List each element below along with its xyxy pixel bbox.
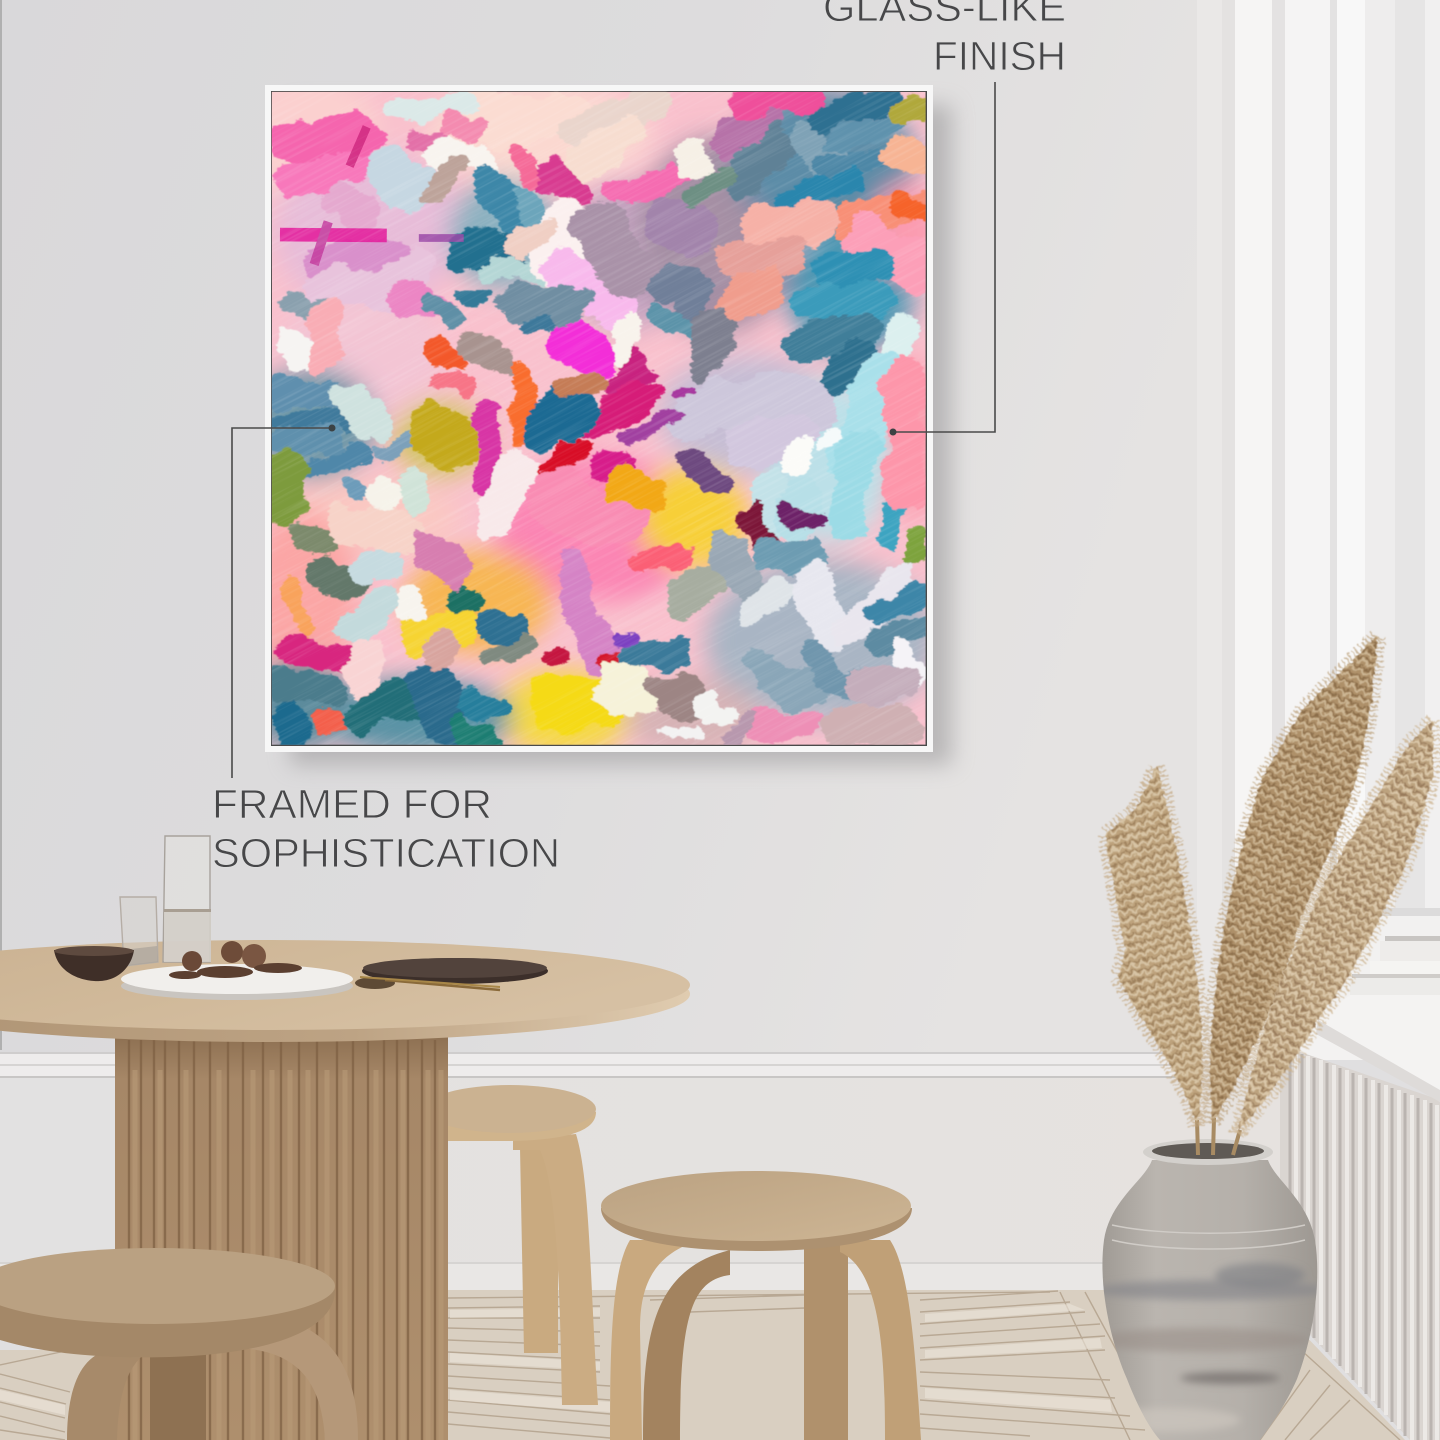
- callout text: glass-like finish: [823, 0, 1066, 79]
- stack of books: [1350, 936, 1440, 995]
- white frame: [265, 85, 933, 752]
- sharp magenta bars: [280, 127, 464, 264]
- radiator: [1280, 1045, 1440, 1440]
- vase weathering: [1090, 1263, 1325, 1432]
- callout text: framed for sophistication: FRAMED FOR: [212, 781, 492, 827]
- table top: [0, 940, 690, 1042]
- glass carafe: [163, 836, 211, 962]
- leader dot: framed for sophistication: [328, 424, 336, 432]
- stool legs: [610, 1240, 700, 1440]
- window frame: [1197, 0, 1440, 1060]
- wall: [0, 0, 1200, 1060]
- leader dot: glass-like finish: [890, 428, 896, 436]
- frame inner gap: [271, 91, 927, 746]
- floor: [0, 1290, 1405, 1440]
- stool legs: [150, 1340, 206, 1440]
- leader line: glass-like finish: [893, 82, 995, 432]
- back stool: [424, 1085, 598, 1405]
- callout text: glass-like finish: FINISH: [933, 33, 1066, 79]
- callout: glass-like finish: [823, 0, 1066, 436]
- dark wooden plate: [362, 958, 548, 984]
- vase rim: [1143, 1139, 1273, 1165]
- stool seat: [0, 1290, 335, 1357]
- skirting board: [0, 1262, 1110, 1290]
- plume: middle: [1210, 636, 1377, 1122]
- stool seat: [601, 1208, 912, 1251]
- soft colour wash: [272, 92, 926, 745]
- wooden bowl: [54, 946, 134, 981]
- callout: framed for sophistication: [212, 424, 560, 876]
- window sill: [1316, 995, 1440, 1102]
- plume: right: [1237, 720, 1433, 1133]
- plume: left: [1105, 767, 1202, 1125]
- vase: [1090, 1139, 1325, 1440]
- callout text: framed for sophistication: SOPHISTICATION: [212, 830, 560, 876]
- pile of nuts: [169, 941, 302, 979]
- left wall edge: [0, 0, 2, 1050]
- spoon and fork: [355, 977, 500, 990]
- dado rail: [0, 1052, 1190, 1078]
- lower wall panel: [0, 1060, 1290, 1300]
- marble board: [121, 964, 353, 1000]
- brush bristle streaks: [272, 92, 926, 745]
- glass tumbler: [120, 897, 158, 966]
- pampas grass: [1105, 636, 1433, 1155]
- stems: [1197, 1118, 1240, 1155]
- callout text: framed for sophistication: [212, 781, 560, 876]
- front stool: [0, 1248, 358, 1440]
- leader line: framed for sophistication: [232, 428, 332, 778]
- abstract painting: [272, 92, 926, 745]
- table pedestal: [115, 1030, 448, 1440]
- brush strokes: [278, 98, 919, 739]
- painting shadow on wall: [290, 105, 952, 765]
- middle stool: [601, 1171, 921, 1440]
